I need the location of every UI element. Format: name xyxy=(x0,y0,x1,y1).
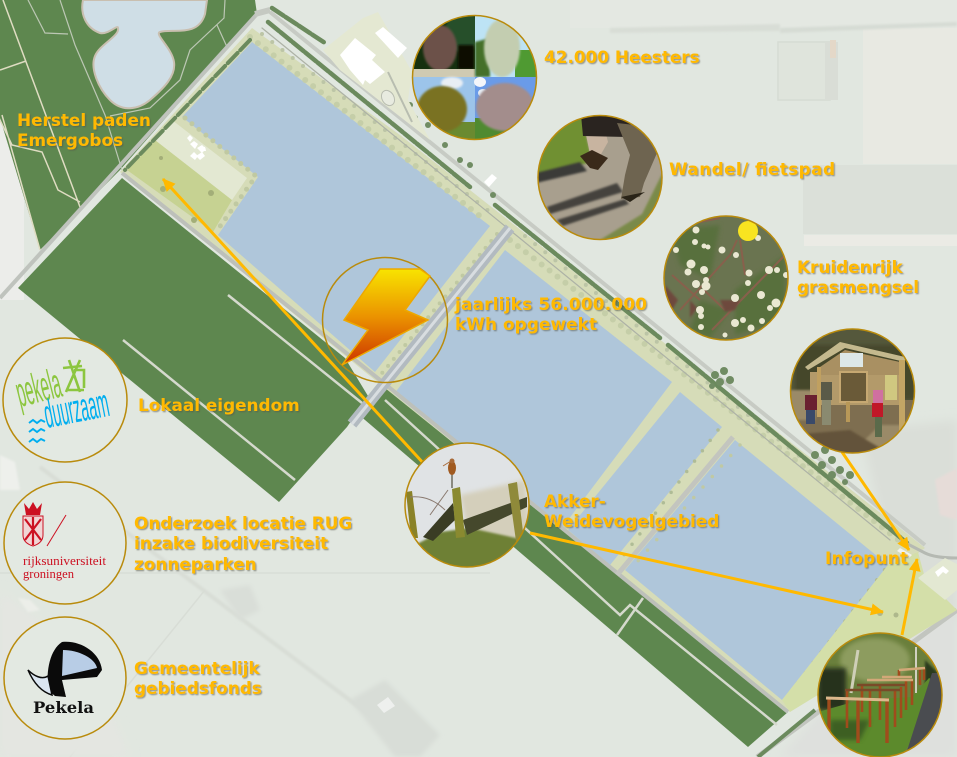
arrow: info board to infopunt xyxy=(842,452,909,550)
field paths xyxy=(123,295,777,725)
lake xyxy=(82,0,207,108)
logo: Gemeente Pekela: Pekela xyxy=(33,698,94,717)
tree belts xyxy=(125,8,907,700)
photo: herb-rich grass xyxy=(660,215,790,341)
photo: bench frames xyxy=(815,632,945,757)
label: Wandel/ fietspad: Wandel/ fietspad xyxy=(669,159,835,179)
arrow: bench photo to infopunt xyxy=(902,559,917,635)
agricultural field west xyxy=(18,178,368,502)
logo: Rijksuniversiteit Groningen: rijksuniversiteit xyxy=(23,553,106,568)
arrow: bird area to NW meadow xyxy=(163,179,425,465)
solar panel field 1 xyxy=(182,42,490,372)
logo: Rijksuniversiteit Groningen xyxy=(4,482,126,604)
label: RUG research: zonneparken xyxy=(134,554,257,574)
icon: lightning circle xyxy=(322,258,448,382)
photo: godwit on fence post xyxy=(403,442,533,572)
solar panel field 4 xyxy=(625,440,888,700)
agricultural field south xyxy=(358,388,788,747)
label: yearly energy output: kWh opgewekt xyxy=(455,314,597,334)
label: Kruidenrijk grasmengsel: grasmengsel xyxy=(797,277,919,297)
logo: Rijksuniversiteit Groningen: groningen xyxy=(23,566,74,581)
label: Infopunt: Infopunt xyxy=(825,548,908,568)
label: RUG research: inzake biodiversiteit xyxy=(134,533,328,553)
label: Gemeentelijk gebiedsfonds: gebiedsfonds xyxy=(134,678,262,698)
solar panel field 3 xyxy=(568,392,722,565)
photo: shrubs xyxy=(412,12,541,142)
forest: Emergobos xyxy=(0,0,257,250)
arrow: bird area to east meadow xyxy=(530,533,883,612)
light green meadow NW xyxy=(127,120,247,232)
photo: walking path xyxy=(536,115,668,240)
label: RUG research: Onderzoek locatie RUG xyxy=(134,513,352,533)
small hedge trees xyxy=(399,87,854,485)
text: duurzaam xyxy=(40,381,113,437)
label: Lokaal eigendom: Lokaal eigendom xyxy=(138,395,300,415)
label: 42.000 Heesters: 42.000 Heesters xyxy=(544,47,700,67)
label: Herstel paden Emergobos: Emergobos xyxy=(17,130,123,150)
roads xyxy=(122,173,957,757)
logo: Gemeente Pekela xyxy=(4,617,126,739)
photo: information kiosk xyxy=(788,328,918,454)
label: Akker- Weidevogelgebied: Akker- xyxy=(544,491,606,511)
label: Gemeentelijk gebiedsfonds: Gemeentelijk xyxy=(134,658,260,678)
meadow east and infopoint xyxy=(782,548,957,712)
label: Akker- Weidevogelgebied: Weidevogelgebied xyxy=(544,511,719,531)
label: Kruidenrijk grasmengsel: Kruidenrijk xyxy=(797,257,903,277)
logo: Pekela Duurzaam xyxy=(3,338,127,462)
farm buildings top xyxy=(323,12,497,187)
label: yearly energy output: jaarlijks 56.000.000 xyxy=(454,294,647,314)
solar panel field 2 xyxy=(394,250,672,528)
logo: Pekela Duurzaam: pekela xyxy=(11,359,66,416)
label: Herstel paden Emergobos: Herstel paden xyxy=(17,110,151,130)
